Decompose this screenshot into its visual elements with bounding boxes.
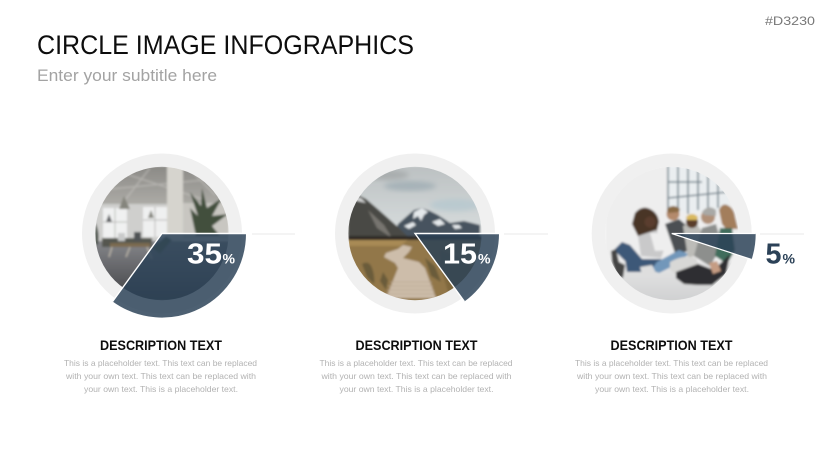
- ring: [89, 160, 235, 307]
- ring: [598, 160, 745, 307]
- body text: [320, 358, 513, 394]
- body text: with your own text. This text can be replaced with: [576, 371, 767, 381]
- value: 35%: 35: [187, 238, 222, 270]
- photo: office interior: [95, 166, 229, 301]
- percent sign: %: [222, 250, 236, 266]
- body text: [575, 358, 768, 394]
- body text: with your own text. This text can be replaced with: [65, 371, 256, 381]
- body text: This is a placeholder text. This text can be replaced: [64, 358, 257, 368]
- connector line: [504, 233, 548, 235]
- panel: 15 percent: [320, 160, 548, 394]
- percent sign: %: [478, 250, 491, 266]
- body text: your own text. This is a placeholder text.: [595, 384, 749, 394]
- panel: 35 percent: [64, 160, 295, 394]
- photo: mountain boardwalk: [348, 166, 482, 302]
- body text: your own text. This is a placeholder text.: [84, 384, 238, 394]
- heading: DESCRIPTION TEXT: [100, 337, 222, 353]
- ring: [342, 160, 488, 307]
- body text: with your own text. This text can be replaced with: [320, 371, 512, 381]
- subtitle: Enter your subtitle here: [37, 66, 217, 85]
- value: 15%: 15: [443, 238, 477, 270]
- heading: DESCRIPTION TEXT: [356, 337, 478, 353]
- connector line: [252, 233, 295, 235]
- heading: DESCRIPTION TEXT: [610, 337, 733, 353]
- panel: 5 percent: [575, 160, 804, 394]
- wedge: 35 percent: [113, 234, 246, 318]
- value: 5%: 5: [766, 238, 782, 270]
- wedge: 15 percent: [415, 234, 499, 302]
- title: CIRCLE IMAGE INFOGRAPHICS: [37, 30, 414, 60]
- connector line: [760, 233, 804, 235]
- body text: your own text. This is a placeholder text.: [340, 384, 494, 394]
- body text: This is a placeholder text. This text can be replaced: [575, 358, 768, 368]
- body text: [64, 358, 257, 394]
- wedge: 5 percent: [672, 234, 756, 260]
- photo: team around laptop: [605, 166, 739, 302]
- label: product code: #D3230: [765, 14, 815, 28]
- percent sign: %: [782, 250, 796, 266]
- body text: This is a placeholder text. This text can be replaced: [320, 358, 513, 368]
